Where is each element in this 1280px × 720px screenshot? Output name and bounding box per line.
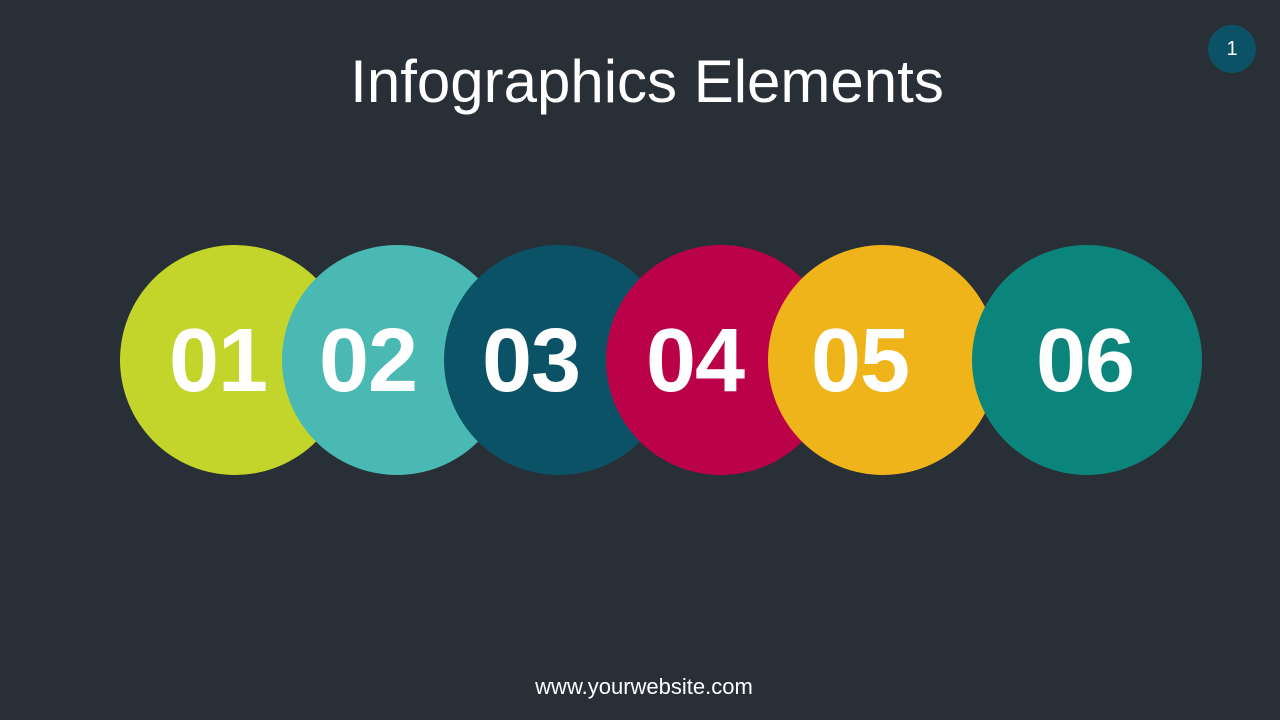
number 04: 04 (646, 311, 744, 411)
circle 01 (120, 245, 350, 475)
number 06: 06 (1036, 311, 1134, 411)
footer url: www.yourwebsite.com (535, 674, 753, 699)
number 02: 02 (319, 311, 417, 411)
circle 05 (768, 245, 998, 475)
page badge (1208, 25, 1256, 73)
circle 02 (282, 245, 512, 475)
page badge: 1 (1226, 38, 1238, 60)
number 05: 05 (811, 311, 909, 411)
number 03: 03 (482, 311, 580, 411)
title: Infographics Elements (350, 48, 944, 115)
circle 04 (606, 245, 836, 475)
circle 06 (972, 245, 1202, 475)
circle 03 (444, 245, 674, 475)
number 01: 01 (169, 311, 267, 411)
